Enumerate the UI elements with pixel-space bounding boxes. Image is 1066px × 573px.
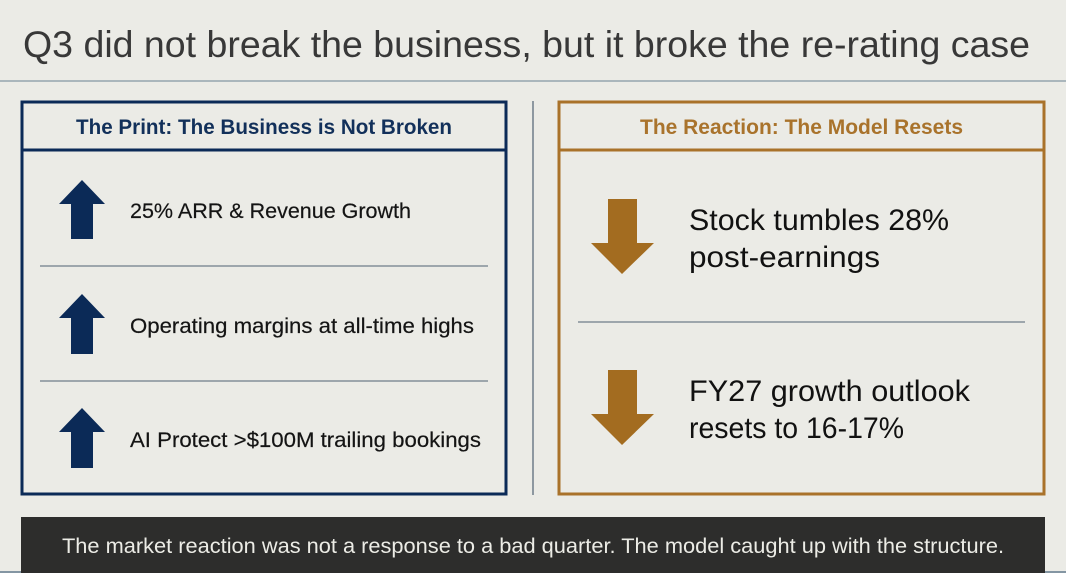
icon: down arrow 1 xyxy=(591,199,654,274)
icon: down arrow 2 xyxy=(591,370,654,445)
text: stock tumbles: Stock tumbles 28% xyxy=(689,204,949,237)
heading: the reaction: The Reaction: The Model Resets xyxy=(640,115,963,139)
text: stock tumbles: post-earnings xyxy=(689,241,880,274)
title: Q3 did not break the business, but it broke the re-rating case xyxy=(23,24,1030,65)
panel: the print xyxy=(22,102,506,494)
text: FY27 outlook: resets to 16-17% xyxy=(689,412,904,445)
text: ARR growth: 25% ARR & Revenue Growth xyxy=(130,199,411,223)
icon: up arrow 3 xyxy=(59,408,105,468)
icon: up arrow 1 xyxy=(59,180,105,239)
text: operating margins: Operating margins at all-time highs xyxy=(130,314,474,338)
text: AI Protect: AI Protect >$100M trailing bookings xyxy=(130,428,481,452)
callout: bottom takeaway bar xyxy=(21,517,1045,573)
icon: up arrow 2 xyxy=(59,294,105,354)
callout: bottom takeaway bar: The market reaction was not a response to a bad quarter. The model caught up with the structure. xyxy=(62,534,1004,558)
heading: the print: The Print: The Business is Not Broken xyxy=(76,115,452,139)
text: FY27 outlook: FY27 growth outlook xyxy=(689,375,971,408)
panel: the reaction xyxy=(559,102,1044,494)
